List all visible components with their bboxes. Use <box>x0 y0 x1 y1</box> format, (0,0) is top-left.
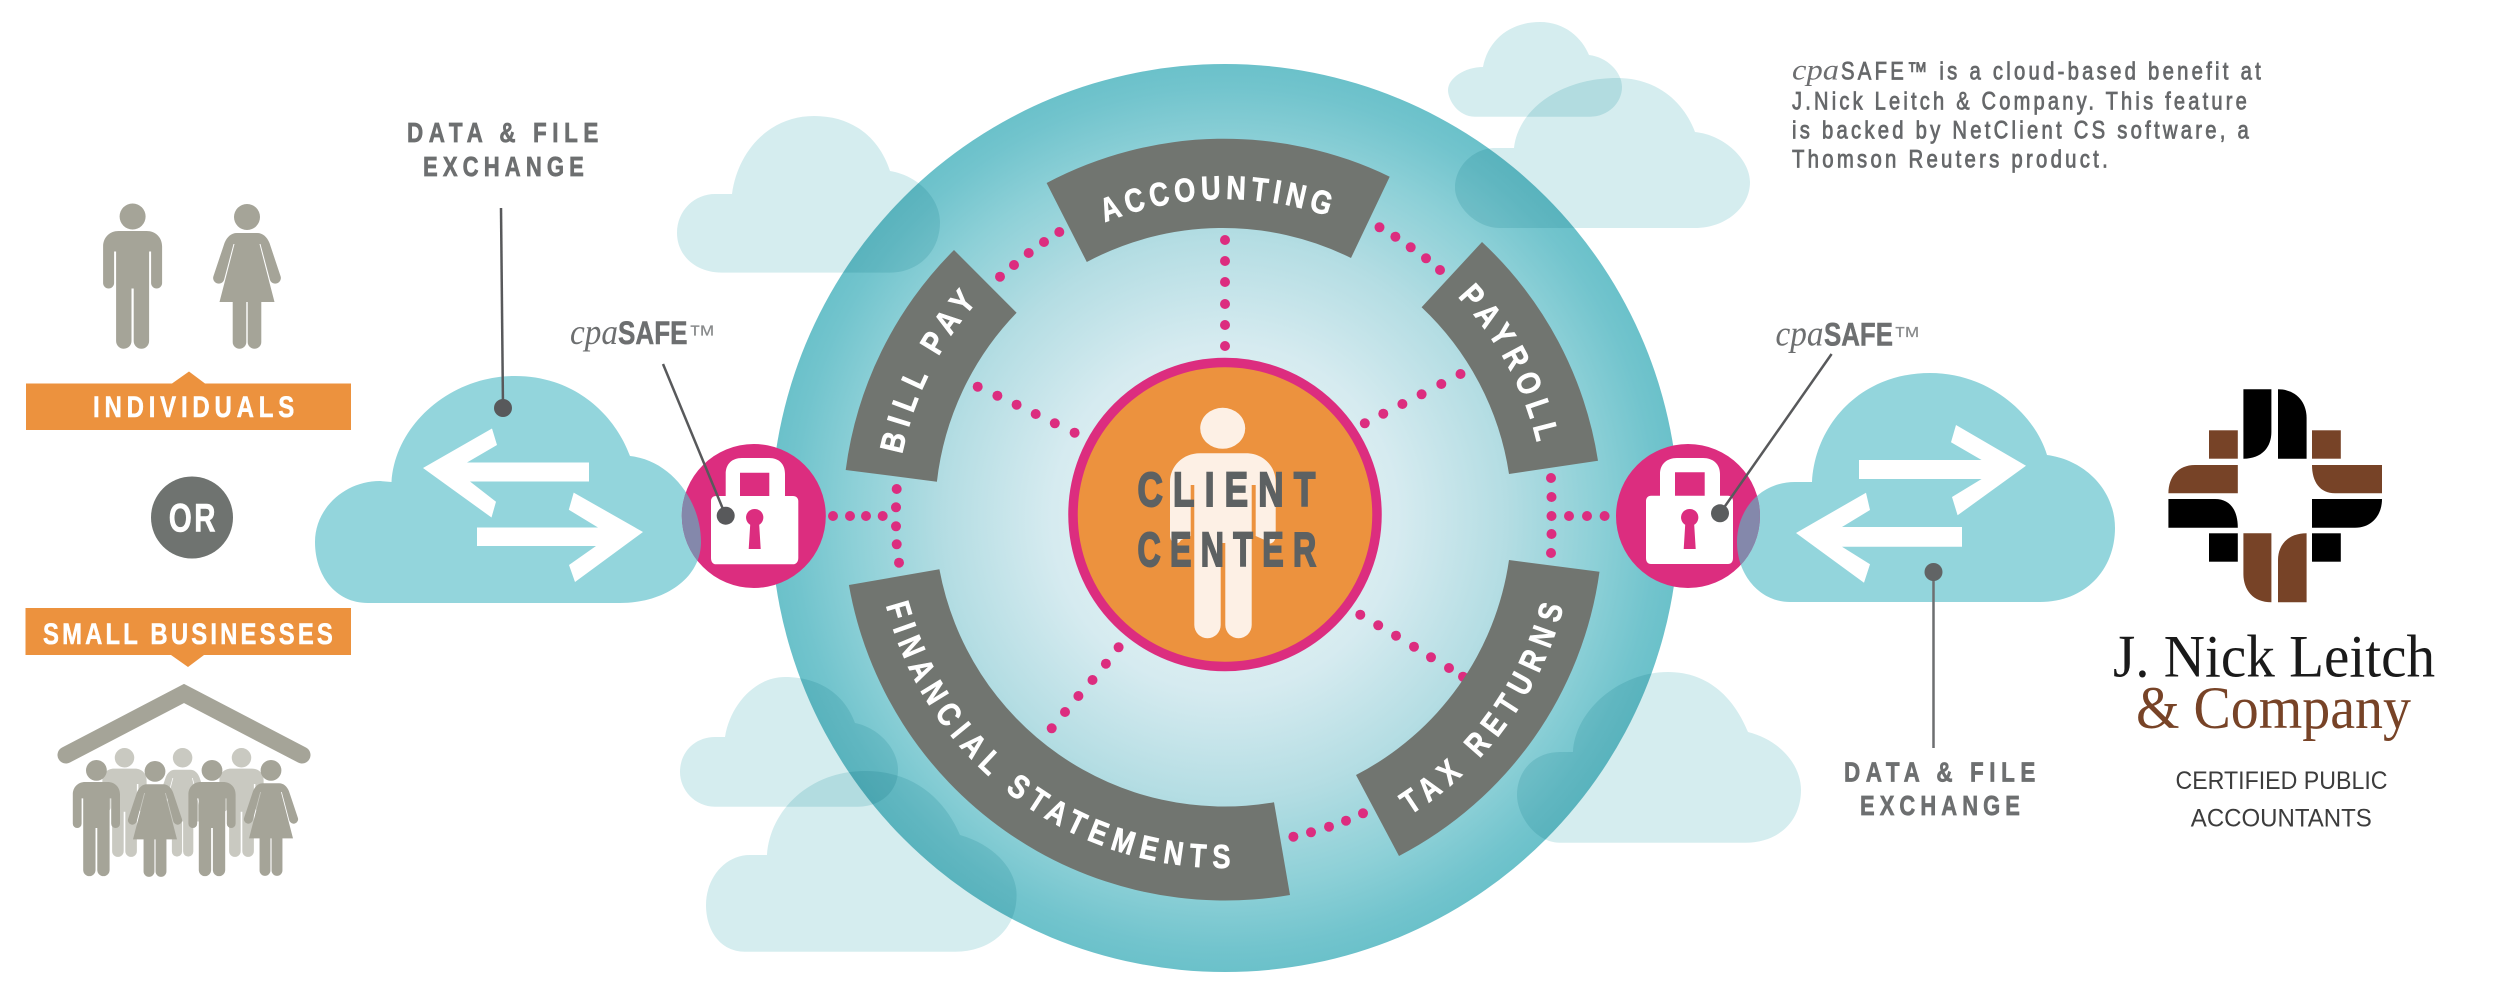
text block: cpaSAFE description: cpa <box>1792 53 1839 86</box>
callout: left data and file exchange <box>407 117 604 417</box>
arc banner: financial statements: FINANCIAL STATEMENTS <box>886 600 1230 869</box>
callout: left cpaSAFE: SAFE <box>618 314 688 351</box>
logo: certified public accountants: ACCOUNTANTS <box>2191 805 2372 833</box>
large teal circle <box>771 64 1679 972</box>
logo: company name: J. Nick Leitch <box>2113 624 2435 690</box>
icon: left padlock <box>682 444 826 588</box>
arc banner: accounting: ACCOUNTING <box>1104 176 1332 222</box>
banner: individuals: INDIVIDUALS <box>93 391 299 424</box>
banner: small businesses: SMALL BUSINESSES <box>43 618 336 651</box>
hub label: CENTER <box>1138 524 1326 577</box>
callout: left data and file exchange: DATA & FILE <box>407 117 604 148</box>
banner: individuals <box>26 372 351 430</box>
callout: right cpaSAFE: cpa <box>1776 314 1824 354</box>
icon: right padlock <box>1616 444 1760 588</box>
arc banner: tax returns: TAX RETURNS <box>1397 603 1562 812</box>
hub label: CLIENT <box>1138 464 1326 517</box>
logo: company name <box>2113 624 2435 741</box>
logo: certified public accountants <box>2176 767 2388 833</box>
background clouds <box>677 22 1801 952</box>
text block: cpaSAFE description: Thomson Reuters product. <box>1792 146 2111 174</box>
banner: small businesses <box>26 608 351 667</box>
connector dots <box>828 222 1610 842</box>
hub label <box>1138 464 1326 577</box>
callout: right cpaSAFE: ™ <box>1893 322 1921 352</box>
callout: left cpaSAFE: ™ <box>688 320 716 350</box>
arc banner: financial statements <box>848 569 1290 900</box>
arc banner: payroll: PAYROLL <box>1458 282 1557 442</box>
arc banner: payroll <box>1422 242 1598 474</box>
text block: cpaSAFE description: J.Nick Leitch & Company. This feature <box>1792 87 2250 115</box>
arc banner: tax returns <box>1356 560 1600 856</box>
callout: right cpaSAFE: SAFE <box>1824 316 1893 353</box>
icon: right cloud with arrows <box>1737 373 2115 602</box>
text block: cpaSAFE description <box>1792 53 2264 174</box>
callout: right data and file exchange: DATA & FILE <box>1844 757 2041 788</box>
arc banner: accounting <box>1046 138 1390 262</box>
badge: or <box>151 476 233 558</box>
arc banner: bill pay <box>846 250 1016 482</box>
text block: cpaSAFE description: SAFE™ is a cloud-based benefit at <box>1841 57 2264 85</box>
callout: right data and file exchange <box>1844 563 2041 821</box>
callout: left cpaSAFE <box>570 312 735 525</box>
icon: individuals <box>103 204 281 349</box>
logo: certified public accountants: CERTIFIED PUBLIC <box>2176 767 2388 795</box>
arc banner: bill pay: BILL PAY <box>880 287 973 453</box>
icon: left cloud with arrows <box>315 376 701 603</box>
callout: left data and file exchange: EXCHANGE <box>423 151 589 182</box>
logo: J. Nick Leitch mark <box>2168 389 2382 602</box>
badge: or: OR <box>169 496 218 540</box>
logo: company name: & Company <box>2136 675 2411 741</box>
icon: small business group under roof <box>66 694 302 877</box>
icon: client figure <box>1170 408 1276 638</box>
client center hub <box>1073 362 1377 666</box>
text block: cpaSAFE description: is backed by NetClient CS software, a <box>1792 116 2252 144</box>
callout: right cpaSAFE <box>1711 314 1921 522</box>
callout: right data and file exchange: EXCHANGE <box>1860 790 2025 821</box>
callout: left cpaSAFE: cpa <box>570 312 618 352</box>
